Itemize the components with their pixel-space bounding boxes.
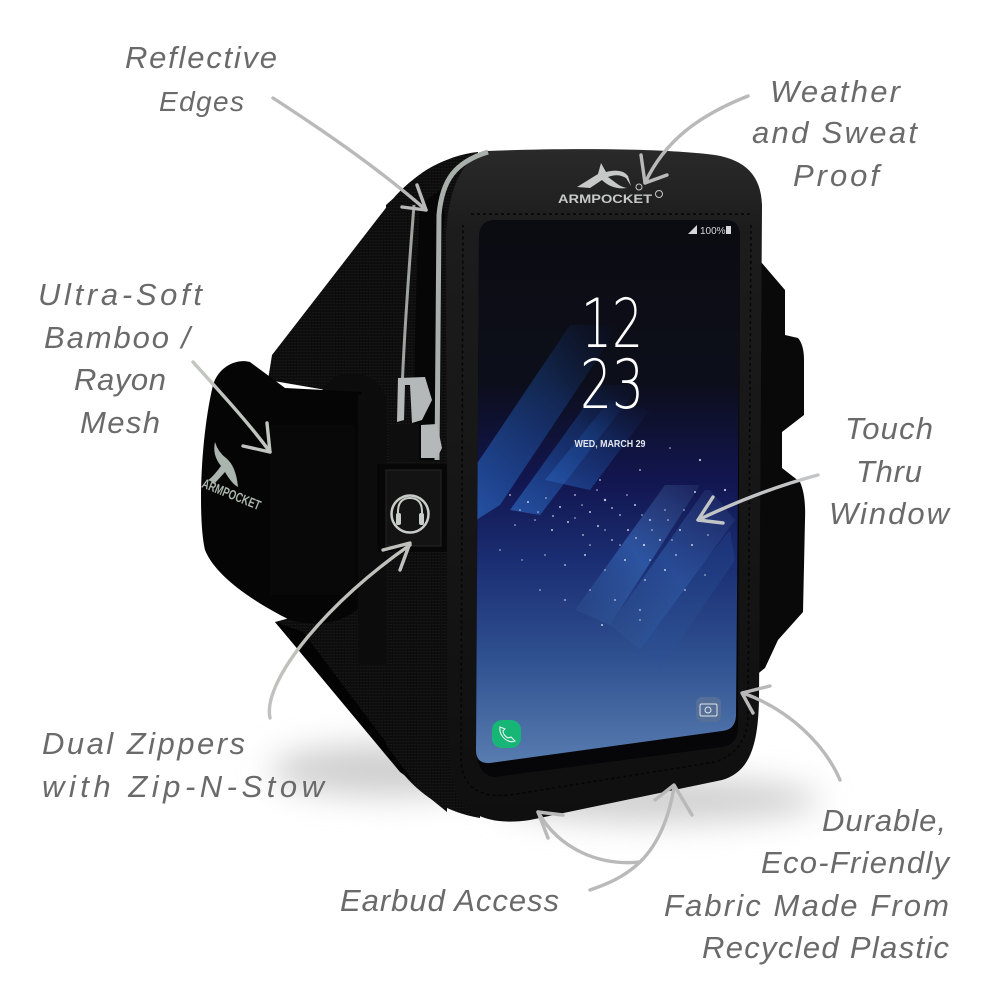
label: Durable, Eco-Friendly Fabric (664, 803, 952, 965)
label: Weather and Sweat Proof (752, 74, 918, 193)
arrow: Ultra-Soft Mesh (193, 362, 270, 452)
right straps (750, 255, 805, 680)
arrow: Reflective Edges (273, 98, 426, 210)
stitching (461, 214, 751, 796)
arrow: Durable fabric (742, 686, 840, 780)
label: Ultra-Soft Bamboo / Rayon Mesh: Rayon (74, 362, 166, 397)
label: Ultra-Soft Bamboo / Rayon Mesh (38, 277, 203, 440)
front panel (446, 149, 762, 822)
armband product (200, 149, 805, 822)
arm strap (200, 361, 362, 624)
label: Weather and Sweat Proof: and Sweat (752, 115, 918, 150)
wallpaper light bands (476, 325, 735, 670)
label: Dual Zippers with Zip-N-Stow (42, 726, 327, 804)
phone screen (470, 215, 745, 770)
label: Reflective Edges: Reflective (125, 40, 277, 75)
side dark column (358, 395, 388, 665)
phone bezel (476, 220, 740, 777)
icon: phone (492, 720, 521, 748)
strap logo: ARMPOCKET (200, 476, 263, 513)
brand logo: ARMPOCKET (558, 194, 652, 206)
clock: 12 (581, 285, 643, 364)
label: Ultra-Soft Bamboo / Rayon Mesh: Ultra-Soft (38, 277, 203, 312)
label: Durable, Eco-Friendly Fabric: Fabric Made From (664, 888, 949, 923)
label: Dual Zippers with Zip-N-Stow: Dual Zippers (42, 726, 245, 761)
circular clip (320, 373, 385, 395)
label: Durable, Eco-Friendly Fabric: Recycled Plastic (702, 930, 950, 965)
arrow: Dual Zippers (269, 543, 410, 718)
clock: 23 (580, 346, 644, 425)
label: Touch Thru Window: Thru (856, 454, 922, 489)
drop shadow (270, 744, 820, 822)
status bar (688, 225, 731, 234)
label: Weather and Sweat Proof: Weather (770, 74, 902, 109)
stars (499, 447, 726, 626)
side panel of pocket (268, 152, 480, 818)
clock (584, 296, 639, 409)
label: Earbud Access: Earbud Access (340, 883, 559, 918)
label: Reflective Edges: Edges (159, 86, 244, 117)
label: Durable, Eco-Friendly Fabric: Eco-Friendly (761, 845, 952, 880)
date: WED, MARCH 29 (574, 438, 646, 450)
label: Ultra-Soft Bamboo / Rayon Mesh: Mesh (80, 405, 160, 440)
arrow: Touch Thru Window (698, 475, 818, 523)
icon: camera (696, 697, 721, 722)
bottom edge strap (275, 622, 418, 785)
zipper track (402, 205, 414, 390)
label: Durable, Eco-Friendly Fabric: Durable, (822, 803, 946, 838)
reflective stripe (437, 152, 488, 460)
label: Touch Thru Window (829, 411, 952, 531)
label: Dual Zippers with Zip-N-Stow: with Zip-N-Stow (42, 769, 327, 804)
brand logo (558, 163, 662, 206)
earbud access tab (377, 464, 447, 552)
zipper pulls (389, 377, 442, 462)
label: Touch Thru Window: Touch (845, 411, 933, 446)
arrow: Weather and Sweat Proof (641, 96, 748, 183)
label: Touch Thru Window: Window (829, 496, 952, 531)
strap logo (200, 442, 263, 513)
label: Reflective Edges (125, 40, 277, 117)
arrows: Earbud Access (538, 785, 692, 890)
status bar: 100% (700, 226, 726, 237)
icon: headphones (392, 496, 428, 532)
label: Ultra-Soft Bamboo / Rayon Mesh: Bamboo / (44, 320, 193, 355)
label: Weather and Sweat Proof: Proof (793, 158, 882, 193)
